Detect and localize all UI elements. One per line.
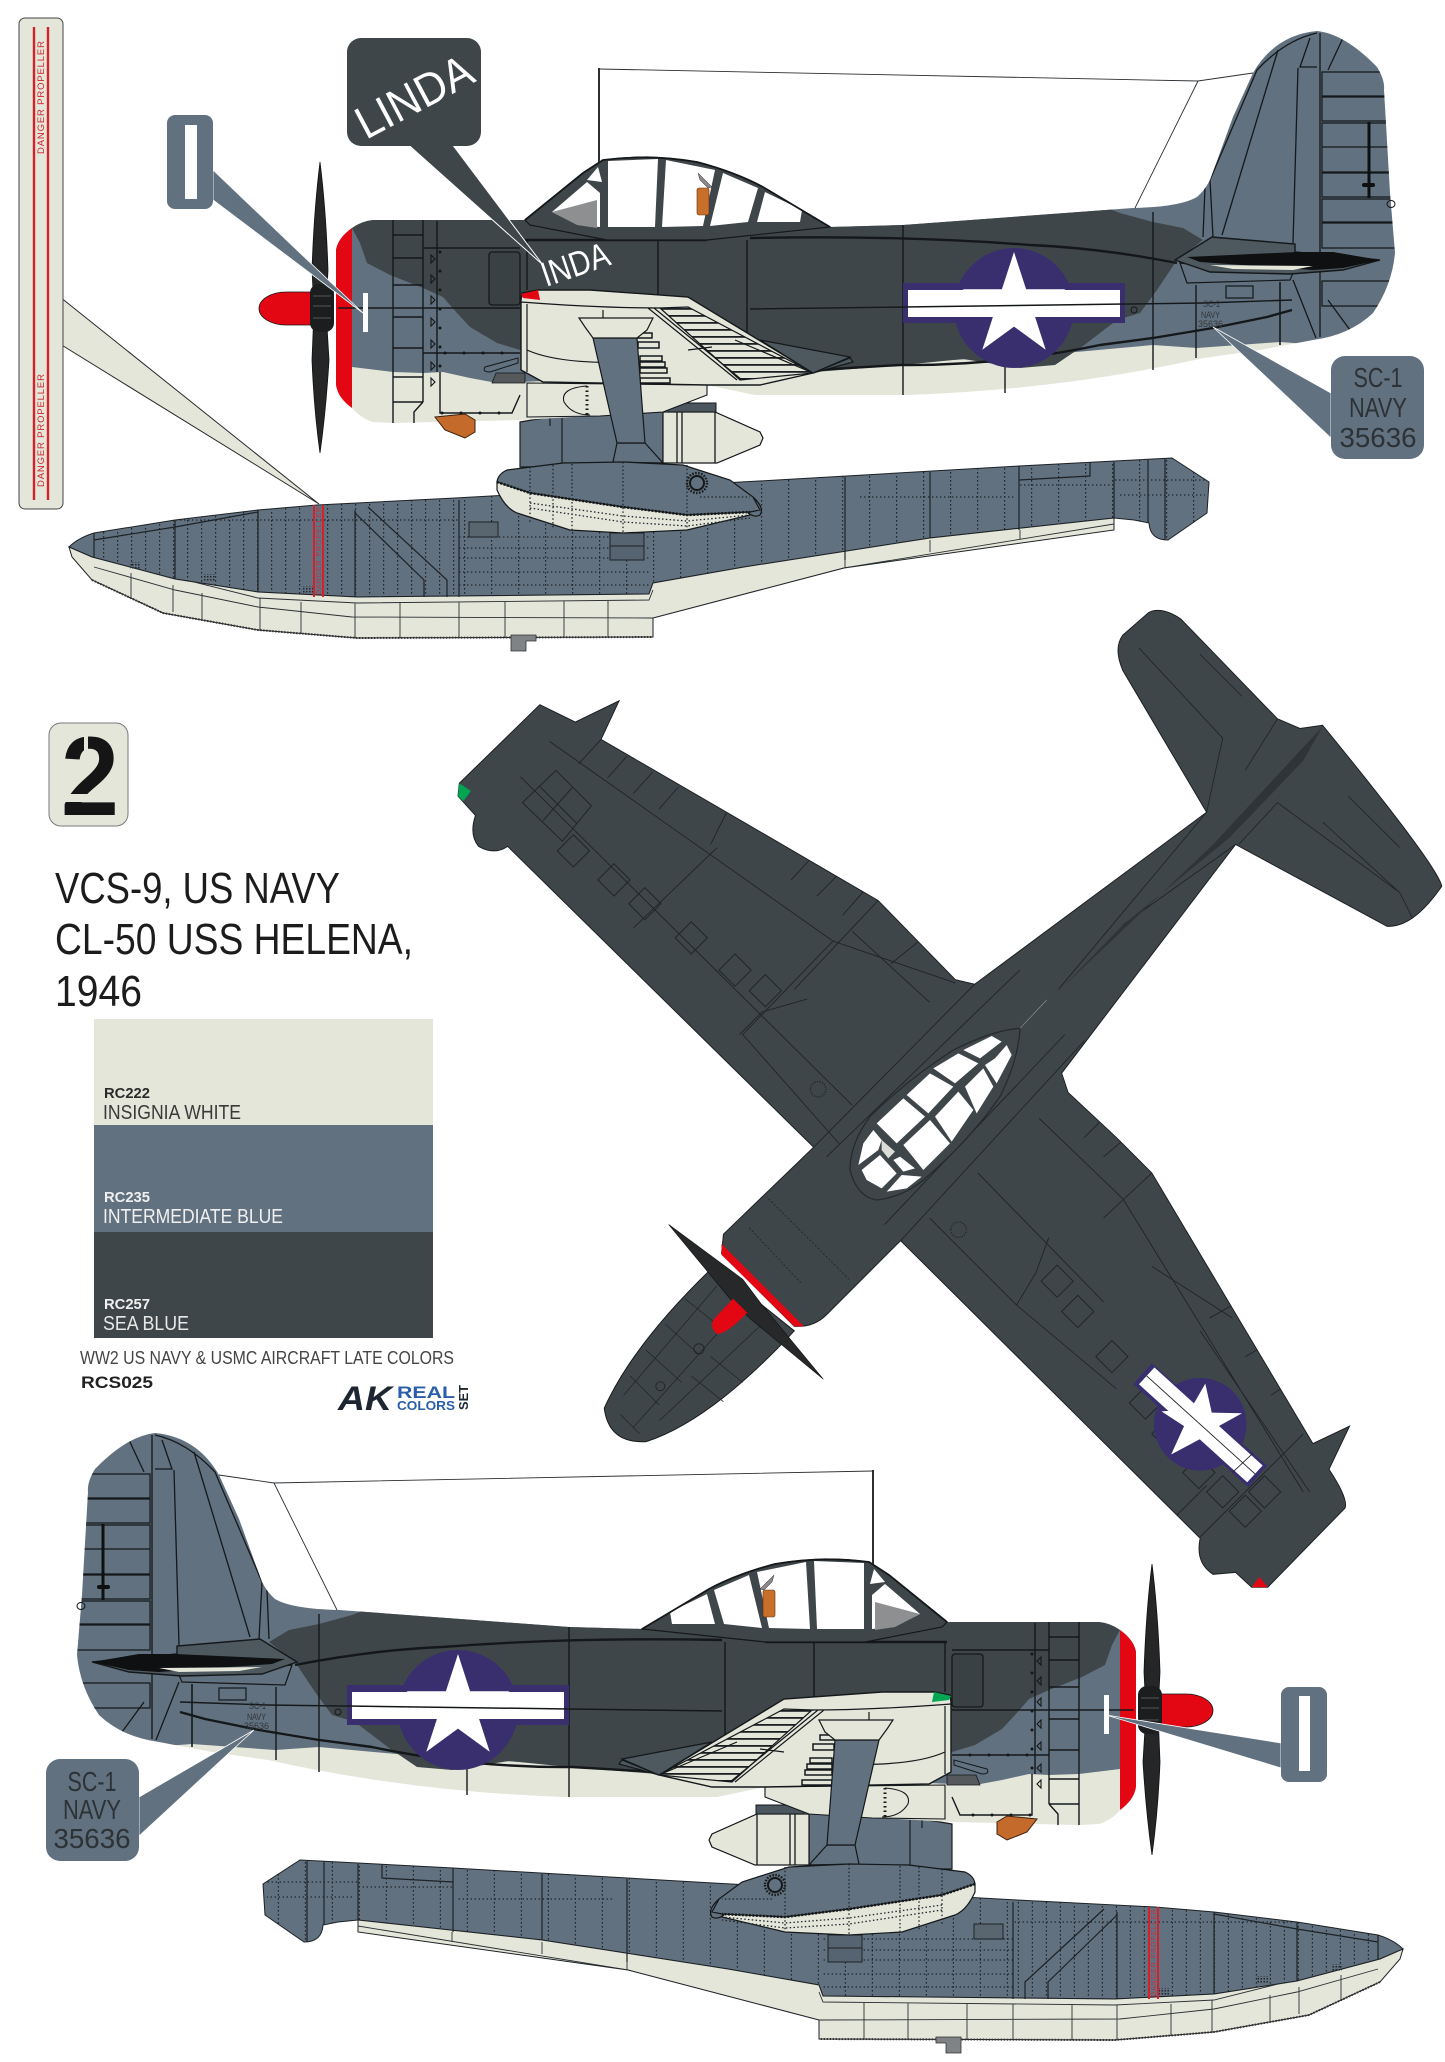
AK Real Colors logo: AK [337, 1380, 395, 1418]
aircraft top view [458, 610, 1442, 1587]
swatch: RC222 insignia white: RC222 [104, 1086, 150, 1102]
national insignia [903, 248, 1125, 368]
swatch: RC235 intermediate blue: RC235 [104, 1190, 150, 1206]
swatch: RC222 insignia white: INSIGNIA WHITE [103, 1102, 241, 1124]
AK Real Colors logo: REAL [397, 1383, 455, 1402]
nose art lettering on fuselage: INDA [536, 235, 615, 295]
danger propeller text upper: DANGER PROPELLER [36, 41, 47, 154]
fuselage panel lines [338, 212, 1292, 423]
canopy [525, 157, 830, 240]
swatch: RC257 sea blue: SEA BLUE [103, 1313, 189, 1335]
green wingtip light [458, 783, 471, 801]
main float strut [579, 318, 663, 463]
red wingtip light [1252, 1577, 1268, 1587]
stripe text on upper float: DANGER PROPELLER [316, 507, 323, 595]
red cowl ring [722, 1244, 804, 1326]
swatch: RC235 intermediate blue: INTERMEDIATE BLUE [103, 1206, 283, 1228]
canopy, top view [850, 1000, 1047, 1200]
icon: red wing-root light [521, 290, 540, 300]
AK Real Colors logo: SET [456, 1385, 471, 1410]
float [69, 440, 1209, 651]
callout: LINDA nose art: LINDA [346, 44, 482, 149]
spinner [259, 292, 318, 325]
fuselage serial text, upper: SC-1 [1203, 299, 1220, 310]
propeller [669, 1225, 823, 1379]
callout: LINDA nose art [346, 38, 543, 265]
callout: serial number, lower [46, 1730, 254, 1861]
red walkway stripe [314, 505, 323, 597]
oil cooler [435, 414, 475, 438]
tail surfaces detail [1139, 635, 1413, 919]
chine hatching [130, 562, 313, 594]
fuselage serial text, upper [1198, 299, 1223, 330]
callout: serial number, upper: 35636 [1340, 422, 1416, 453]
wing panel hatches [522, 770, 1281, 1527]
callout: serial number, lower: 35636 [54, 1823, 130, 1854]
wing root and flaps [492, 290, 853, 417]
callout: white mark on cowl, upper [167, 115, 363, 313]
set name: WW2 US NAVY & USMC AIRCRAFT LATE COLORS [80, 1348, 454, 1368]
red cowl ring [336, 228, 352, 408]
swatch: RC222 insignia white [94, 1019, 433, 1125]
aircraft side view, bottom (starboard side) [52, 1402, 1403, 2053]
cowl details [749, 1199, 849, 1283]
callout: serial number, lower: NAVY [63, 1794, 121, 1825]
fin and rudder structure [1203, 33, 1350, 345]
float walkway callout and danger propeller decal [19, 18, 319, 509]
spinner [712, 1299, 747, 1334]
danger propeller text lower: DANGER PROPELLER [36, 374, 47, 487]
wing and fuselage panel lines [521, 739, 1310, 1537]
fuselage serial text, lower: 35636 [244, 1721, 269, 1732]
fuselage serial text, upper: NAVY [1201, 310, 1220, 321]
float step fitting [511, 635, 536, 651]
float fairing [497, 462, 761, 533]
tailplane [1175, 237, 1380, 283]
title: CL-50 USS HELENA, [55, 915, 413, 964]
swatch: RC235 intermediate blue [94, 1125, 433, 1232]
callout: serial number, upper: NAVY [1349, 392, 1407, 423]
pylon and drop tank [520, 403, 763, 467]
swatch: RC257 sea blue [94, 1232, 433, 1338]
callout: serial number, upper [1213, 327, 1424, 459]
callout: serial number, lower: SC-1 [68, 1766, 116, 1797]
gear wells [810, 1082, 966, 1237]
fuselage serial text, lower: SC-1 [249, 1701, 266, 1712]
antenna mast and wire [599, 68, 1253, 208]
national insignia on wing [1133, 1363, 1267, 1487]
fin seen from above [1062, 727, 1323, 988]
title: VCS-9, US NAVY [55, 864, 340, 913]
fuselage serial text, lower: NAVY [247, 1712, 266, 1723]
icon: green wing-root light [932, 1692, 951, 1702]
title [55, 864, 413, 1016]
airframe silhouette [458, 610, 1442, 1587]
callout: white mark on cowl, lower [1106, 1687, 1327, 1782]
AK Real Colors logo: COLORS [397, 1398, 455, 1413]
AK Real Colors logo [337, 1380, 471, 1418]
fuselage serial text, lower [244, 1701, 269, 1732]
propeller [310, 162, 334, 453]
float nose beneath fuselage [604, 1266, 794, 1442]
callout: serial number, upper: SC-1 [1354, 362, 1402, 393]
aircraft side view, top (port side) [69, 0, 1420, 651]
set code: RCS025 [81, 1373, 153, 1392]
fuselage serial text, upper: 35636 [1198, 319, 1223, 330]
fuselage stencil mark [363, 293, 368, 332]
fuselage and fin [320, 0, 1420, 423]
title: 1946 [55, 967, 142, 1016]
badge: aircraft number 2: 2 [61, 714, 119, 839]
colour swatches [94, 1019, 433, 1338]
stripe text on lower float: DANGER PROPELLER [1151, 1909, 1158, 1997]
swatch: RC257 sea blue: RC257 [104, 1297, 150, 1313]
